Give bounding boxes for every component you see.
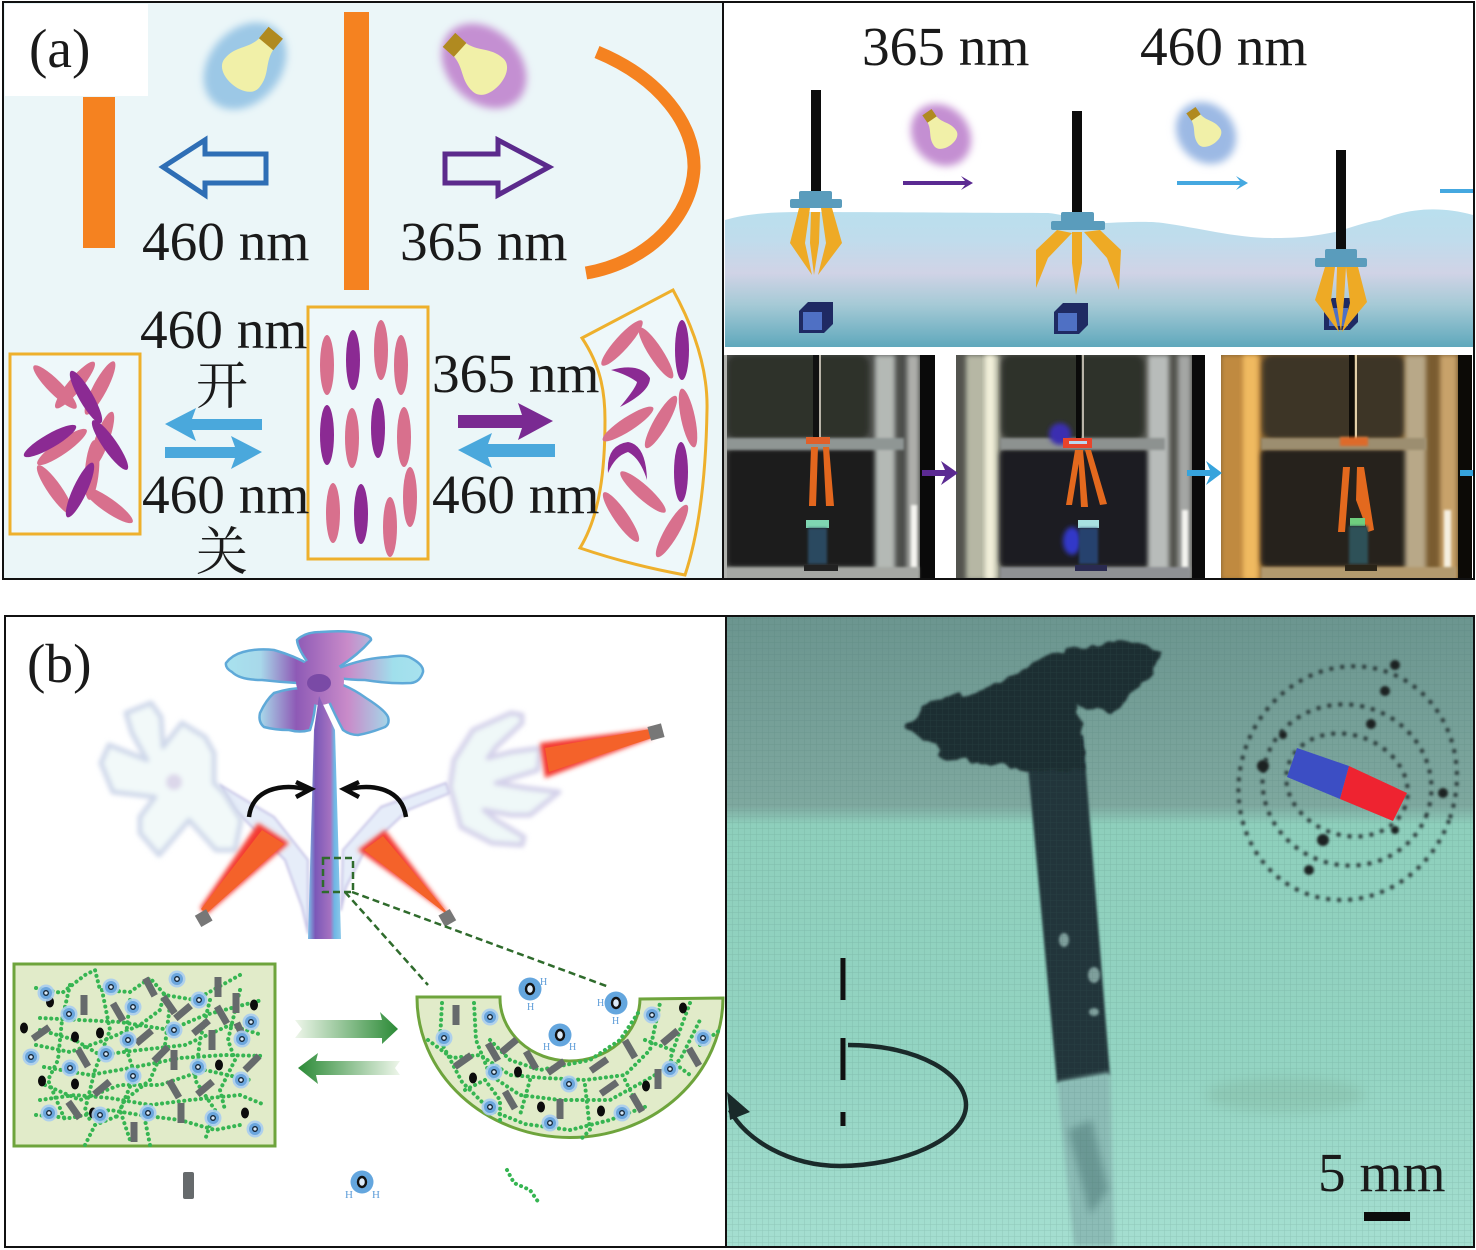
panel: gripper schematic: [723, 2, 1474, 579]
outer border a right: [723, 2, 1474, 579]
text: on: 开: [196, 359, 248, 416]
photo panel border: [726, 616, 1474, 1247]
orange bar short: [83, 97, 115, 248]
upright flower: [226, 631, 423, 735]
legend: water molecule: [345, 1170, 380, 1201]
box: ordered liquid crystal: [308, 307, 428, 559]
white flower left: [101, 703, 241, 855]
gripper 3 with cube: [1315, 150, 1367, 332]
free water molecule 2: [597, 992, 628, 1027]
legend: water molecule: H: [345, 1189, 353, 1201]
beam lower right: [358, 830, 456, 927]
arrow: hollow blue: [163, 140, 266, 195]
curved stem left: [220, 785, 308, 933]
arrow: blue: [1177, 176, 1248, 190]
text: 460 nm back: 460 nm: [432, 464, 599, 525]
legend: water molecule: H: [372, 1189, 380, 1201]
magnetic field lines: [1234, 662, 1460, 904]
free water molecule 2: H: [597, 998, 604, 1009]
water tank: [725, 209, 1473, 347]
arrow: blue stub photo: [1460, 470, 1474, 476]
free water molecule 1: [518, 977, 547, 1013]
dashed zoom box: [323, 858, 609, 987]
bar magnet: [1287, 748, 1407, 821]
label (a): (a): [29, 18, 90, 79]
arrow: blue stub: [1440, 189, 1474, 193]
arrow: green left: [298, 1053, 400, 1084]
free water molecule 3: [543, 1024, 576, 1053]
text: 460 nm: 460 nm: [142, 211, 309, 272]
smudge: [1205, 1077, 1365, 1113]
gripper 1: [790, 90, 842, 275]
free water molecule 1: H: [527, 1002, 534, 1013]
flower center: [307, 674, 331, 692]
icon: blue bulb: [1163, 90, 1249, 176]
mesh texture: [726, 616, 1474, 1248]
cube 2: [1054, 303, 1088, 334]
scale bar: [1364, 1212, 1410, 1221]
beam lower left: [195, 823, 289, 927]
curved black arrow right: [344, 782, 406, 817]
photo 1: gripper open-state start: [724, 355, 935, 580]
polymer network curved: [428, 1003, 720, 1138]
rotation arrow: [727, 1045, 966, 1166]
arrow: purple between photos: [922, 461, 958, 485]
label (b): (b): [27, 633, 91, 694]
text: 365 nm: 365 nm: [862, 16, 1029, 77]
orange bar tall: [344, 12, 369, 290]
text: 460 nm: 460 nm: [1140, 16, 1307, 77]
photo 2: gripper under 365 nm: [956, 355, 1205, 580]
scale label: 5 mm: [1318, 1142, 1446, 1203]
legend: polymer chain: [507, 1170, 539, 1203]
text: off: 关: [196, 525, 248, 582]
text: 460 nm on: 460 nm: [140, 299, 307, 360]
stem: [308, 696, 341, 939]
cube 1: [799, 302, 833, 333]
text: 365 nm forward: 365 nm: [432, 343, 599, 404]
curved black arrow left: [249, 782, 311, 817]
gripper 2: [1036, 111, 1121, 295]
text: 460 nm off: 460 nm: [142, 464, 309, 525]
arrows: blue double pair: [165, 408, 262, 469]
box: curved liquid crystal: [580, 290, 707, 575]
icon: blue light bulb: [187, 6, 303, 126]
gel rectangle: [14, 964, 275, 1146]
panel: (b) schematic of bending flower: [5, 616, 726, 1247]
arrow: purple: [903, 176, 973, 190]
flower hub fill: [296, 657, 344, 705]
arrow: purple forward: [458, 403, 553, 440]
photo panel: magnetically actuated rod: [726, 616, 1476, 1248]
arrow: blue between photos: [1187, 461, 1222, 485]
arrow: blue backward: [458, 433, 555, 468]
white gap below schematic: [724, 347, 1473, 355]
polymer network: [36, 970, 265, 1145]
legend: grey rod: [183, 1172, 194, 1199]
free water molecule 1: H: [540, 977, 547, 988]
free water molecule 3: H: [543, 1042, 550, 1053]
box: disordered liquid crystal: [10, 354, 140, 534]
icon: purple bulb: [898, 92, 984, 178]
arrow: green right: [295, 1012, 398, 1044]
dash-dot rotation axis: [840, 958, 846, 1126]
gel half ring: [417, 997, 723, 1138]
beam upper right: [540, 723, 665, 778]
iron filing clumps: [1257, 660, 1448, 875]
arrow: hollow purple: [445, 140, 549, 195]
curved stem right: [341, 783, 450, 910]
icon: purple light bulb: [425, 7, 543, 125]
free water molecule 3: H: [569, 1042, 576, 1053]
orange bent arc: [586, 52, 694, 273]
panel: (a) schematic of light-responsive bending: [3, 2, 723, 582]
T-shaped actuator: [903, 640, 1165, 1246]
label (a): [5, 4, 148, 96]
photo 3: gripper under 460 nm: [1221, 355, 1472, 580]
text: 365 nm: 365 nm: [400, 211, 567, 272]
white flower right, curled: [450, 713, 559, 845]
free water molecule 2: H: [612, 1016, 619, 1027]
